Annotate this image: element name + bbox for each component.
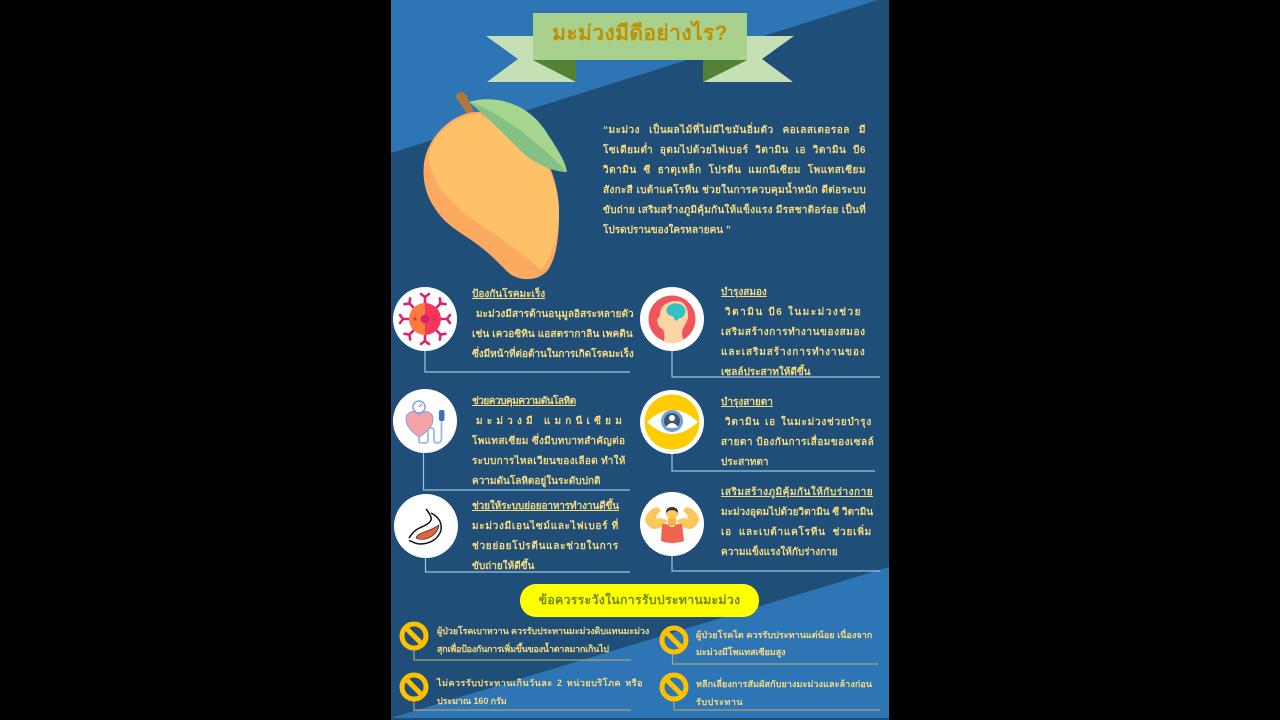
body text: เสริมสร้างการทำงานของสมอง [721, 326, 866, 338]
text [696, 678, 872, 707]
text: มะม่วงมีโพแทสเซียมสูง [696, 647, 786, 657]
panel: digestion [394, 494, 630, 573]
warning: daily limit [400, 672, 643, 711]
text: ผู้ป่วยโรคเบาหวาน ควรรับประทานมะม่วงดิบแทนมะม่วง [437, 626, 649, 636]
body text: สายตา ป้องกันการเสื่อมของเซลล์ [721, 436, 874, 448]
icon: heart with gauge [393, 389, 630, 491]
heading pill: precautions [520, 584, 759, 617]
text: ไม่ควรรับประทานเกินวันละ 2 หน่วยบริโภค หรือ [437, 678, 643, 688]
panel: immunity [640, 486, 880, 572]
panel: blood pressure [393, 389, 630, 491]
title ribbon [486, 13, 794, 82]
warning: diabetes [400, 622, 649, 661]
heading: ช่วยควบคุมความดันโลหิต [472, 396, 576, 406]
icon: brain head [640, 287, 880, 378]
body text: เซลล์ประสาทให้ดีขึ้น [721, 366, 811, 378]
body text: มะม่วงมี แมกนีเซียม [476, 416, 626, 426]
body text: เช่น เควอซิทิน แอสตรากาลิน เพคติน [472, 328, 633, 340]
intro paragraph: โปรดปรานของใครหลายคน ” [603, 224, 731, 236]
body text: มะม่วงมีสารต้านอนุมูลอิสระหลายตัว [476, 308, 634, 320]
intro paragraph: “มะม่วง เป็นผลไม้ที่ไม่มีไขมันอิ่มตัว คอเลสเตอรอล มี [603, 124, 866, 136]
body text [472, 308, 634, 360]
text: ผู้ป่วยโรคไต ควรรับประทานแต่น้อย เนื่องจาก [696, 630, 872, 640]
heading: เสริมสร้างภูมิคุ้มกันให้กับร่างกาย [721, 486, 873, 498]
icon: muscle man [640, 492, 880, 572]
intro paragraph: โซเดียมต่ำ อุดมไปด้วยไฟเบอร์ วิตามิน เอ วิตามิน บี6 [603, 144, 866, 156]
body text: ซึ่งมีหน้าที่ต่อต้านในการเกิดโรคมะเร็ง [472, 348, 634, 360]
heading: บำรุงสมอง [721, 286, 767, 298]
text: หลีกเลี่ยงการสัมผัสกับยางมะม่วงและล้างก่อน [696, 679, 872, 689]
warning: kidney disease [660, 626, 878, 665]
icon: prohibited [660, 626, 878, 665]
body text: วิตามิน เอ ในมะม่วงช่วยบำรุง [725, 416, 872, 428]
body text: ขับถ่ายให้ดีขึ้น [472, 560, 534, 572]
heading: ช่วยให้ระบบย่อยอาหารทำงานดีขึ้น [472, 500, 619, 512]
body text [721, 506, 874, 558]
panel: brain [640, 286, 880, 378]
intro paragraph: ขับถ่าย เสริมสร้างภูมิคุ้มกันให้แข็งแรง มีรสชาติอร่อย เป็นที่ [603, 204, 866, 216]
poster background [391, 0, 889, 720]
icon: virus [393, 287, 630, 373]
panel: cancer prevention [393, 287, 634, 373]
intro paragraph: สังกะสี เบต้าแคโรทีน ช่วยในการควบคุมน้ำหนัก ดีต่อระบบ [603, 184, 866, 196]
text [437, 626, 649, 655]
body text: ความแข็งแรงให้กับร่างกาย [721, 546, 838, 558]
text [696, 628, 872, 658]
body text: โพแทสเซียม ซึ่งมีบทบาทสำคัญต่อ [472, 436, 625, 446]
body text: ช่วยย่อยโปรตีนและช่วยในการ [472, 540, 619, 552]
icon: prohibited [400, 672, 631, 711]
body text: มะม่วงมีเอนไซม์และไฟเบอร์ ที่ [472, 520, 619, 532]
body text: ระบบการไหลเวียนของเลือด ทำให้ [472, 456, 626, 466]
body text: ประสาทตา [721, 456, 769, 468]
body text: ความดันโลหิตอยู่ในระดับปกติ [472, 476, 600, 486]
title text: มะม่วงมีดีอย่างไร? [552, 22, 728, 45]
text: รับประทาน [696, 697, 743, 707]
intro paragraph [602, 122, 866, 236]
icon: mango [424, 92, 567, 280]
warning: mango sap [660, 672, 880, 711]
panel: eyes [640, 390, 875, 472]
heading: บำรุงสายตา [721, 396, 773, 408]
body text [721, 416, 874, 468]
body text [472, 518, 619, 572]
text: สุกเพื่อป้องกันการเพิ่มขึ้นของน้ำตาลมากเกินไป [437, 644, 609, 654]
icon: stomach [394, 494, 630, 573]
text [436, 678, 643, 706]
body text: และเสริมสร้างการทำงานของ [721, 346, 866, 358]
heading pill: precautions: ข้อควรระวังในการรับประทานมะม่วง [539, 593, 740, 607]
body text [472, 415, 626, 488]
body text: วิตามิน บี6 ในมะม่วงช่วย [725, 306, 862, 318]
heading: ป้องกันโรคมะเร็ง [472, 288, 545, 300]
intro paragraph: วิตามิน ซี ธาตุเหล็ก โปรตีน แมกนีเซียม โพแทสเซียม [603, 164, 866, 176]
text: ประมาณ 160 กรัม [437, 696, 507, 706]
body text: มะม่วงอุดมไปด้วยวิตามิน ซี วิตามิน [721, 506, 873, 518]
icon: prohibited [660, 672, 880, 711]
icon: prohibited [400, 622, 631, 661]
icon: eye [640, 390, 875, 472]
body text [721, 306, 866, 378]
body text: เอ และเบต้าแคโรทีน ช่วยเพิ่ม [721, 526, 872, 538]
